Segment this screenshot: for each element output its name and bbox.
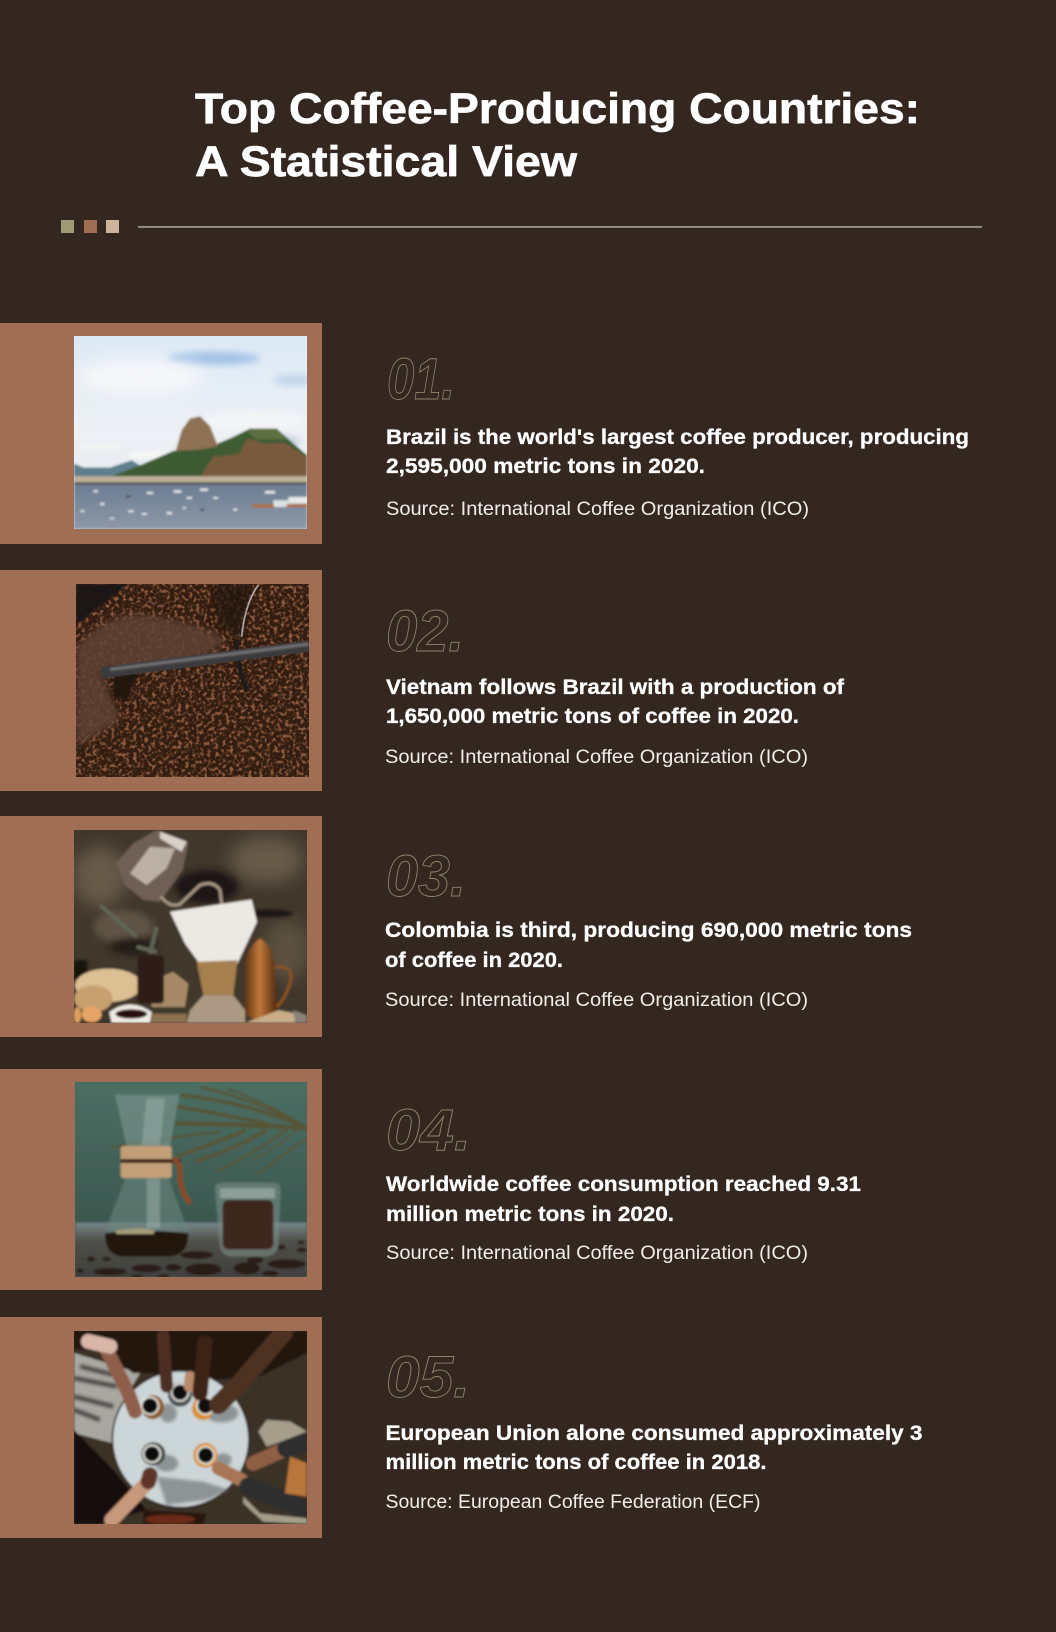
round table	[112, 1371, 249, 1508]
photo frame 5	[0, 1317, 322, 1538]
arms	[88, 1333, 307, 1520]
scattered beans	[76, 1240, 307, 1277]
photo: pour-over coffee setup	[74, 830, 307, 1023]
photo: people around a table with coffee cups	[74, 1331, 307, 1524]
statement: of coffee in 2020.	[385, 948, 563, 972]
statement: Worldwide coffee consumption reached 9.31	[386, 1172, 861, 1196]
photo: Rio de Janeiro bay and Sugarloaf	[74, 336, 307, 529]
saucers and cups	[141, 1383, 217, 1468]
statement: Vietnam follows Brazil with a production of	[386, 675, 845, 699]
glass cup	[215, 1183, 281, 1257]
header accent squares	[61, 220, 119, 233]
photo frame 3	[0, 816, 322, 1037]
source: Source: International Coffee Organization (ICO)	[385, 990, 808, 1011]
number 01: 01.	[387, 347, 455, 412]
kettle	[116, 830, 223, 912]
source: Source: International Coffee Organization (ICO)	[386, 499, 809, 520]
photo frame 1	[0, 323, 322, 544]
title	[195, 85, 920, 186]
number 02: 02.	[386, 599, 464, 664]
photo frame 2	[0, 570, 322, 791]
cup	[109, 1004, 152, 1023]
statement: 1,650,000 metric tons of coffee in 2020.	[386, 704, 799, 728]
statement: 2,595,000 metric tons in 2020.	[386, 454, 705, 478]
statement: million metric tons in 2020.	[386, 1202, 674, 1226]
panel: Colombia	[0, 816, 912, 1037]
title: A Statistical View	[195, 138, 578, 186]
number 05: 05.	[386, 1345, 470, 1410]
statement: Brazil is the world's largest coffee producer, producing	[386, 425, 969, 449]
number 03: 03.	[386, 844, 466, 909]
photo: roasted coffee beans in a roaster	[76, 584, 309, 777]
statement: European Union alone consumed approximately 3	[386, 1421, 923, 1445]
panel: Vietnam	[0, 570, 845, 791]
panel: Worldwide consumption	[0, 1069, 861, 1290]
statement: million metric tons of coffee in 2018.	[386, 1450, 766, 1474]
title: Top Coffee-Producing Countries:	[195, 85, 920, 133]
photo: glass coffee maker and cup	[75, 1082, 307, 1277]
number 04: 04.	[386, 1098, 471, 1163]
panel: European Union	[0, 1317, 923, 1538]
table shadows	[155, 1404, 238, 1505]
bread	[73, 969, 142, 1023]
chemex	[187, 960, 245, 1023]
panel: Brazil	[0, 323, 969, 544]
source: Source: International Coffee Organization (ICO)	[385, 747, 808, 768]
statement	[385, 918, 912, 972]
statement: Colombia is third, producing 690,000 metric tons	[385, 918, 912, 942]
copper pot	[245, 939, 291, 1020]
jar	[137, 955, 164, 1004]
statement	[386, 1421, 923, 1474]
coffee maker	[105, 1094, 191, 1257]
source: Source: European Coffee Federation (ECF)	[386, 1492, 760, 1513]
plant	[100, 905, 157, 954]
statement	[386, 1172, 861, 1226]
palm frond	[112, 1087, 307, 1175]
photo frame 4	[0, 1069, 322, 1290]
statement	[386, 425, 969, 478]
source: Source: International Coffee Organization (ICO)	[386, 1243, 808, 1264]
statement	[386, 675, 845, 728]
